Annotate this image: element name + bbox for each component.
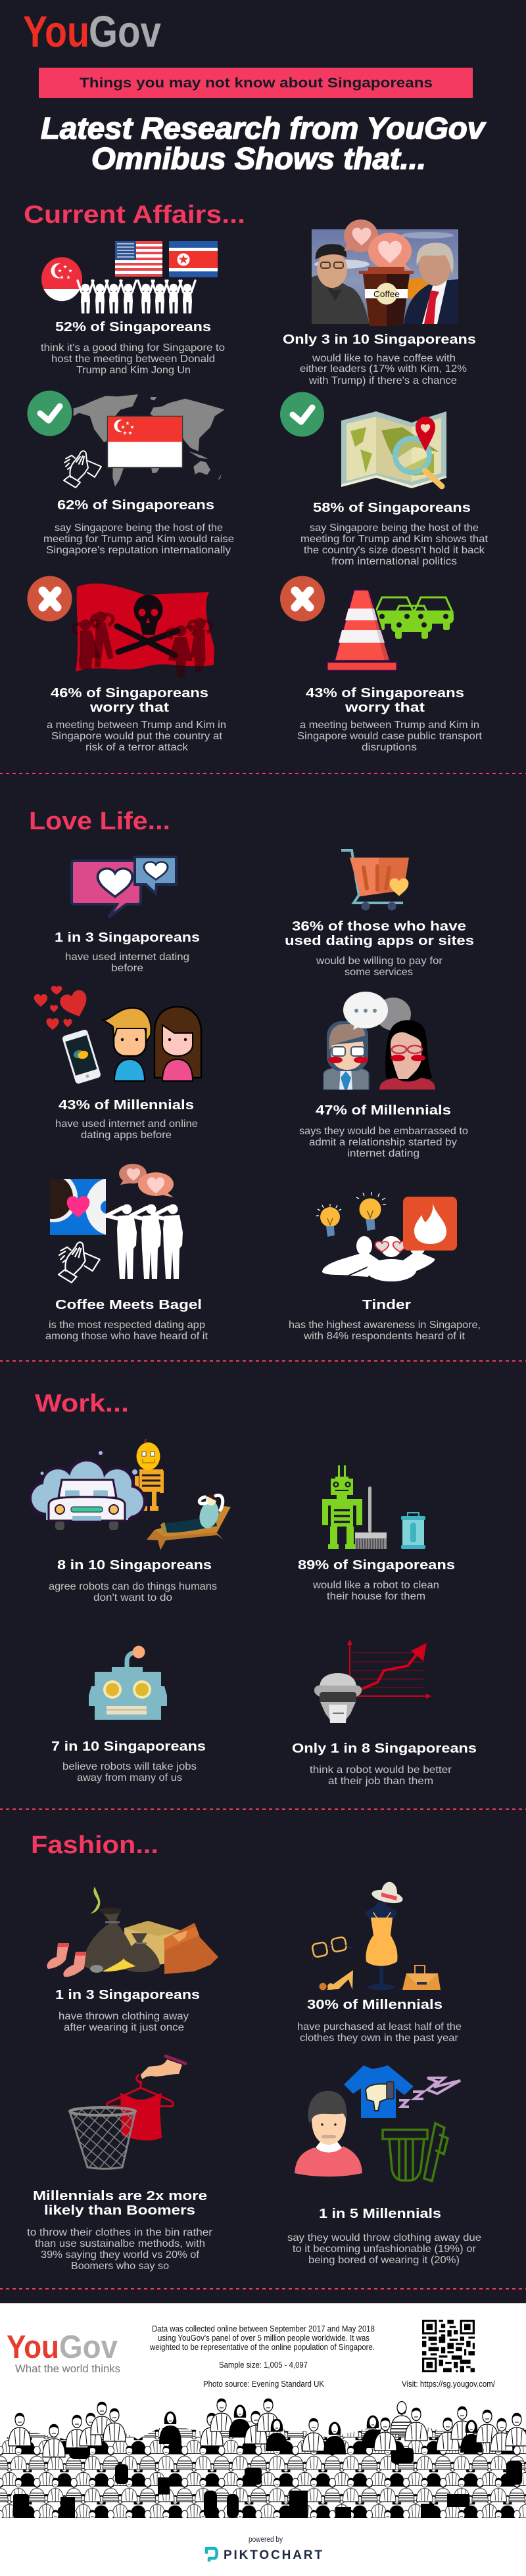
body text [297, 720, 483, 753]
body text [45, 1320, 208, 1342]
panel: 62% of Singaporeans [28, 390, 234, 556]
icon: light bulbs, people with heart glasses, Tinder logo [316, 1192, 457, 1281]
stat heading: 62% of Singaporeans [57, 497, 214, 513]
body text: say Singapore being the host of the [310, 522, 479, 534]
header: YouGov logo: You [23, 7, 89, 57]
body text: says they would be embarrassed to [299, 1126, 468, 1137]
body text: with 84% respondents heard of it [303, 1331, 466, 1342]
panel: 30% of Millennials [297, 1882, 462, 2044]
body text: their house for them [327, 1591, 425, 1602]
stat heading: 43% of Singaporeans [306, 685, 464, 701]
methodology text: Photo source: Evening Standard UK [203, 2380, 325, 2389]
body text: would like a robot to clean [312, 1580, 439, 1591]
stat heading [33, 2188, 207, 2218]
body text: say Singapore being the host of the [55, 522, 223, 534]
body text: have thrown clothing away [59, 2011, 189, 2022]
body text [47, 720, 226, 753]
stat heading: Only 3 in 10 Singaporeans [283, 332, 476, 347]
panel: 58% of Singaporeans [280, 392, 489, 567]
panel: 89% of Singaporeans [298, 1465, 455, 1602]
icon: green tick [280, 392, 324, 436]
body text: a meeting between Trump and Kim in [300, 720, 479, 731]
footer YouGov logo [7, 2330, 120, 2375]
stat heading: 1 in 5 Millennials [319, 2206, 441, 2221]
panel: 1 in 3 Singaporeans dating [55, 857, 200, 974]
stat heading: used dating apps or sites [285, 933, 474, 948]
body text: host the meeting between Donald [51, 354, 215, 365]
footer YouGov logo: Gov [59, 2330, 118, 2365]
body text: Trump and Kim Jong Un [76, 365, 191, 376]
stat heading [285, 919, 474, 948]
body text [316, 955, 443, 978]
body text: than use sustainalbe methods, with [35, 2238, 205, 2249]
body text: to throw their clothes in the bin rather [27, 2227, 213, 2238]
icon: hearts, phone, boy and girl [34, 986, 201, 1084]
powered by Piktochart: PIKTOCHART [224, 2548, 322, 2562]
body text: have purchased at least half of the [297, 2021, 462, 2033]
icon: world map with Singapore flag [64, 394, 225, 488]
body text: 39% saying they world vs 20% of [41, 2249, 200, 2261]
body text: Singapore would case public transport [297, 731, 483, 742]
powered by Piktochart [206, 2536, 322, 2562]
panel: Only 3 in 10 Singaporeans [283, 219, 476, 386]
stat heading: Tinder [362, 1297, 411, 1312]
stat heading: worry that [89, 700, 169, 715]
stat heading: worry that [345, 700, 425, 715]
body text: before [111, 963, 143, 974]
body text: being bored of wearing it (20%) [308, 2255, 460, 2266]
body text [41, 342, 225, 376]
panel: Only 1 in 8 Singaporeans [292, 1640, 477, 1787]
body text [55, 1118, 198, 1141]
stat heading: Coffee Meets Bagel [55, 1297, 202, 1312]
icon: embarrassed man and woman with speech bubbles [323, 992, 435, 1090]
title: Latest Research from YouGov [41, 111, 486, 145]
banner: things you may not know: Things you may not know about Singaporeans [80, 76, 433, 91]
panel: 1 in 5 Millennials [287, 2065, 481, 2266]
header: YouGov logo: Gov [89, 7, 161, 57]
body text: don't want to do [93, 1592, 172, 1603]
body text: among those who have heard of it [45, 1331, 208, 1342]
footer: white panel [0, 2303, 526, 2576]
icon: chat bubbles with hearts [72, 857, 176, 917]
body text [49, 1581, 217, 1603]
icon: green tick [28, 390, 72, 436]
body text: meeting for Trump and Kim shows that [300, 534, 489, 545]
icon: Coffee Meets Bagel logo, clapping hands, saluting people [50, 1164, 183, 1283]
methodology text [149, 2324, 375, 2389]
methodology text: using YouGov's panel of over 5 million people worldwide. It was [158, 2334, 370, 2343]
body text [43, 522, 234, 556]
body text: Singapore would put the country at [51, 731, 223, 742]
panel: 43% of Singaporeans worry [280, 576, 483, 753]
panel: 7 in 10 Singaporeans [51, 1645, 206, 1783]
methodology text: weighted to be representative of the online population of Singapore. [149, 2343, 375, 2352]
body text: Boomers who say so [71, 2261, 169, 2272]
icon: red cross [280, 576, 325, 622]
stat heading: 52% of Singaporeans [55, 319, 211, 334]
QR code [422, 2320, 475, 2372]
body text: after wearing it just once [64, 2022, 184, 2033]
body text: risk of a terror attack [85, 742, 189, 753]
section heading: Work: Work... [35, 1390, 129, 1417]
body text [287, 2232, 481, 2266]
body text [27, 2227, 213, 2272]
body text: from international politics [331, 556, 457, 567]
icon: bored man, blue t-shirt with thumbs down, zzz, green bin [295, 2065, 460, 2181]
panel: Millennials are 2x more likely [27, 2056, 213, 2272]
panel: 52% of Singaporeans [39, 241, 225, 376]
icon: shopping cart with heart [341, 850, 409, 911]
body text: some services [345, 967, 413, 978]
stat heading: Only 1 in 8 Singaporeans [292, 1741, 477, 1756]
icon: photo of leaders with coffee cup and heart bubbles: Coffee [373, 289, 400, 299]
stat heading: 46% of Singaporeans [51, 685, 208, 701]
stat heading [51, 685, 208, 715]
body text [289, 1320, 481, 1342]
icon: traffic cone and cars [327, 589, 454, 671]
body text: have used internet and online [55, 1118, 198, 1130]
QR caption: Visit: https://sg.yougov.com/ [402, 2380, 495, 2389]
stat heading: 8 in 10 Singaporeans [57, 1557, 212, 1573]
stat heading: 89% of Singaporeans [298, 1557, 455, 1573]
icon: mannequin dress, hat, sunglasses, shoes, bag [312, 1882, 441, 1990]
stat heading: likely than Boomers [44, 2203, 195, 2218]
body text: think a robot would be better [310, 1764, 452, 1776]
powered by Piktochart: powered by [249, 2536, 283, 2544]
title [41, 111, 486, 175]
body text: agree robots can do things humans [49, 1581, 217, 1592]
icon: photo of leaders with coffee cup and heart bubbles [312, 219, 458, 326]
stat heading: Millennials are 2x more [33, 2188, 207, 2203]
body text [297, 2021, 462, 2044]
icon: car in cloud, orange robot, person on lounger [30, 1439, 231, 1550]
panel: 36% of those who have used dating apps [285, 850, 474, 978]
panel: Tinder [289, 1192, 481, 1342]
header: YouGov logo [23, 7, 161, 57]
section heading: Current Affairs: Current Affairs... [24, 201, 245, 229]
stat heading [306, 685, 464, 715]
body text: clothes they own in the past year [300, 2033, 459, 2044]
icon: map with magnifier and pin [341, 411, 446, 488]
body text: would be willing to pay for [316, 955, 443, 967]
section heading: Love Life: Love Life... [29, 808, 170, 835]
illustration: crowd of people [0, 2399, 526, 2518]
title: Omnibus Shows that... [91, 141, 426, 175]
icon: hand dropping red top into waste basket [70, 2056, 185, 2169]
icon: helmet robot and rising chart [314, 1640, 431, 1723]
icon: Singapore flag circle, US and North Korea flags, people [39, 241, 218, 313]
body text: has the highest awareness in Singapore, [289, 1320, 481, 1331]
body text: dating apps before [81, 1130, 172, 1141]
body text: a meeting between Trump and Kim in [47, 720, 226, 731]
stat heading: 36% of those who have [292, 919, 466, 934]
stat heading: 7 in 10 Singaporeans [51, 1739, 206, 1754]
panel: Coffee Meets Bagel [30, 1164, 208, 1342]
body text: admit a relationship started by [309, 1137, 457, 1148]
body text [300, 353, 467, 386]
body text: say they would throw clothing away due [287, 2232, 481, 2243]
body text: believe robots will take jobs [62, 1761, 197, 1772]
panel: 8 in 10 Singaporeans [30, 1439, 231, 1603]
section heading: Fashion: Fashion... [31, 1831, 158, 1859]
body text [300, 522, 489, 567]
icon: red cross [28, 576, 72, 622]
body text: would like to have coffee with [312, 353, 456, 364]
stat heading: 1 in 3 Singaporeans [55, 1987, 200, 2002]
body text [59, 2011, 189, 2033]
panel: 1 in 3 Singaporeans fashion [47, 1887, 218, 2033]
body text [299, 1126, 468, 1159]
body text: away from many of us [77, 1772, 182, 1783]
stat heading: 47% of Millennials [316, 1103, 451, 1118]
banner: things you may not know [39, 68, 473, 98]
footer YouGov logo: What the world thinks [15, 2363, 120, 2375]
methodology text: Data was collected online between September 2017 and May 2018 [152, 2324, 375, 2334]
body text [62, 1761, 197, 1783]
stat heading: 58% of Singaporeans [313, 500, 471, 515]
body text: to it becoming unfashionable (19%) or [293, 2243, 477, 2255]
body text [312, 1580, 439, 1602]
icon: pirate flag with frightened people [73, 584, 214, 677]
body text [310, 1764, 452, 1787]
panel: 46% of Singaporeans worry [28, 576, 226, 753]
body text: with Trump) if there's a chance [308, 375, 457, 386]
body text: at their job than them [328, 1776, 433, 1787]
icon: green robot with broom and bin [322, 1465, 425, 1549]
icon: robot face [89, 1645, 167, 1720]
body text: disruptions [362, 742, 417, 753]
footer YouGov logo: You [7, 2330, 59, 2365]
methodology text: Sample size: 1,005 - 4,097 [219, 2360, 308, 2370]
body text: either leaders (17% with Kim, 12% [300, 363, 467, 375]
stat heading: 43% of Millennials [59, 1097, 194, 1113]
body text: meeting for Trump and Kim would raise [43, 534, 234, 545]
body text [65, 952, 189, 974]
body text: the country's size doesn't hold it back [304, 545, 485, 556]
body text: think it's a good thing for Singapore to [41, 342, 225, 354]
panel: 43% of Millennials [34, 986, 201, 1141]
stat heading: 30% of Millennials [307, 1997, 442, 2012]
icon: rubbish bags, box, skirt, socks, banana [47, 1887, 218, 1977]
body text: internet dating [347, 1148, 419, 1159]
panel: 47% of Millennials [299, 992, 468, 1159]
body text: Singapore's reputation internationally [46, 545, 231, 556]
stat heading: 1 in 3 Singaporeans [55, 930, 200, 945]
body text: is the most respected dating app [49, 1320, 205, 1331]
body text: have used internet dating [65, 952, 189, 963]
